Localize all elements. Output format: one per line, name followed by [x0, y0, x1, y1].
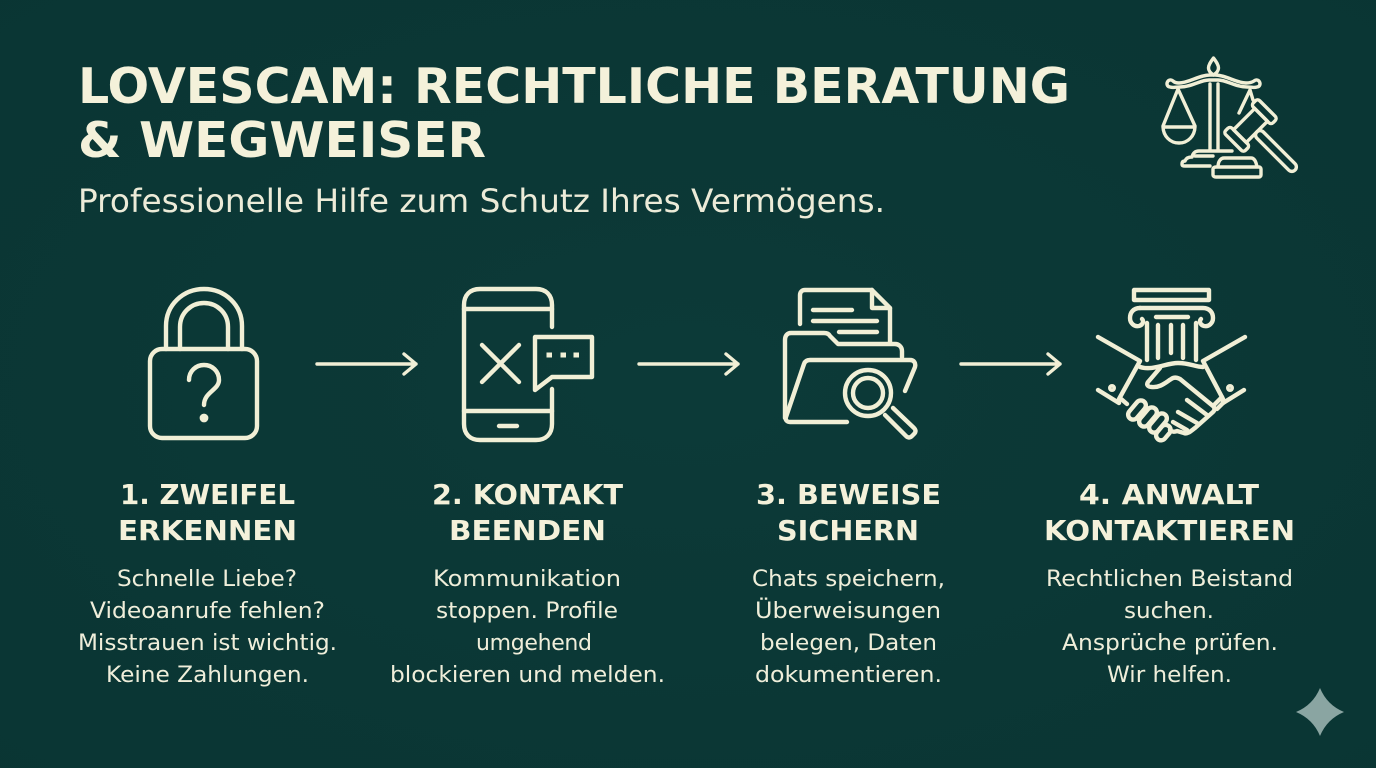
step 1 [78, 289, 337, 688]
text: step 3 description: dokumentieren. [755, 663, 942, 688]
heading: step 4: 4. ANWALT [1079, 478, 1259, 511]
heading: step 4 [1044, 478, 1295, 547]
text: step 4 description [1046, 567, 1293, 688]
text: step 3 description: Chats speichern, [752, 567, 945, 592]
heading: step 2: 2. KONTAKT [432, 478, 623, 511]
text: step 1 description: Keine Zahlungen. [106, 663, 309, 688]
icon: phone with X and chat bubble [464, 289, 592, 440]
text: step 2 description [390, 567, 665, 688]
title: LOVESCAM: RECHTLICHE BERATUNG [78, 58, 1070, 115]
step 2 [390, 289, 665, 688]
icon: padlock with question mark [150, 289, 257, 438]
heading: step 3: SICHERN [777, 514, 919, 547]
step 4 [1044, 290, 1295, 688]
text: step 4 description: suchen. [1124, 599, 1214, 624]
subtitle: Professionelle Hilfe zum Schutz Ihres Vermögens. [78, 182, 885, 220]
text: step 2 description: blockieren und melden. [390, 663, 665, 688]
heading: step 4: KONTAKTIEREN [1044, 514, 1295, 547]
title [78, 58, 1070, 169]
text: step 4 description: Rechtlichen Beistand [1046, 567, 1293, 592]
arrow 2 [639, 354, 738, 374]
heading: step 3: 3. BEWEISE [756, 478, 941, 511]
icon: folder, document and magnifier [785, 290, 916, 438]
heading: step 1: ERKENNEN [118, 514, 297, 547]
text: step 3 description: Überweisungen [755, 598, 941, 624]
text: step 4 description: Ansprüche prüfen. [1062, 631, 1278, 656]
heading: step 2: BEENDEN [449, 514, 606, 547]
heading: step 1 [118, 478, 297, 547]
text: step 1 description: Videoanrufe fehlen? [90, 599, 325, 624]
heading: step 2 [432, 478, 623, 547]
arrow 3 [961, 354, 1060, 374]
text: step 1 description: Misstrauen ist wichtig. [78, 631, 337, 656]
icon: scales and gavel [1163, 58, 1312, 187]
title: & WEGWEISER [78, 112, 486, 169]
text: step 4 description: Wir helfen. [1107, 663, 1232, 688]
heading: step 3 [756, 478, 941, 547]
icon: column and handshake [1098, 290, 1245, 442]
text: step 2 description: stoppen. Profile [436, 599, 618, 624]
arrow 1 [317, 354, 416, 374]
icon: four-point sparkle [1296, 688, 1344, 736]
heading: step 1: 1. ZWEIFEL [120, 478, 295, 511]
text: step 3 description [752, 567, 945, 688]
text: step 2 description: Kommunikation [433, 567, 621, 592]
text: step 1 description [78, 567, 337, 688]
text: step 1 description: Schnelle Liebe? [117, 567, 297, 592]
step 3 [752, 290, 945, 688]
text: step 2 description: umgehend [476, 631, 592, 656]
text: step 3 description: belegen, Daten [760, 631, 937, 656]
